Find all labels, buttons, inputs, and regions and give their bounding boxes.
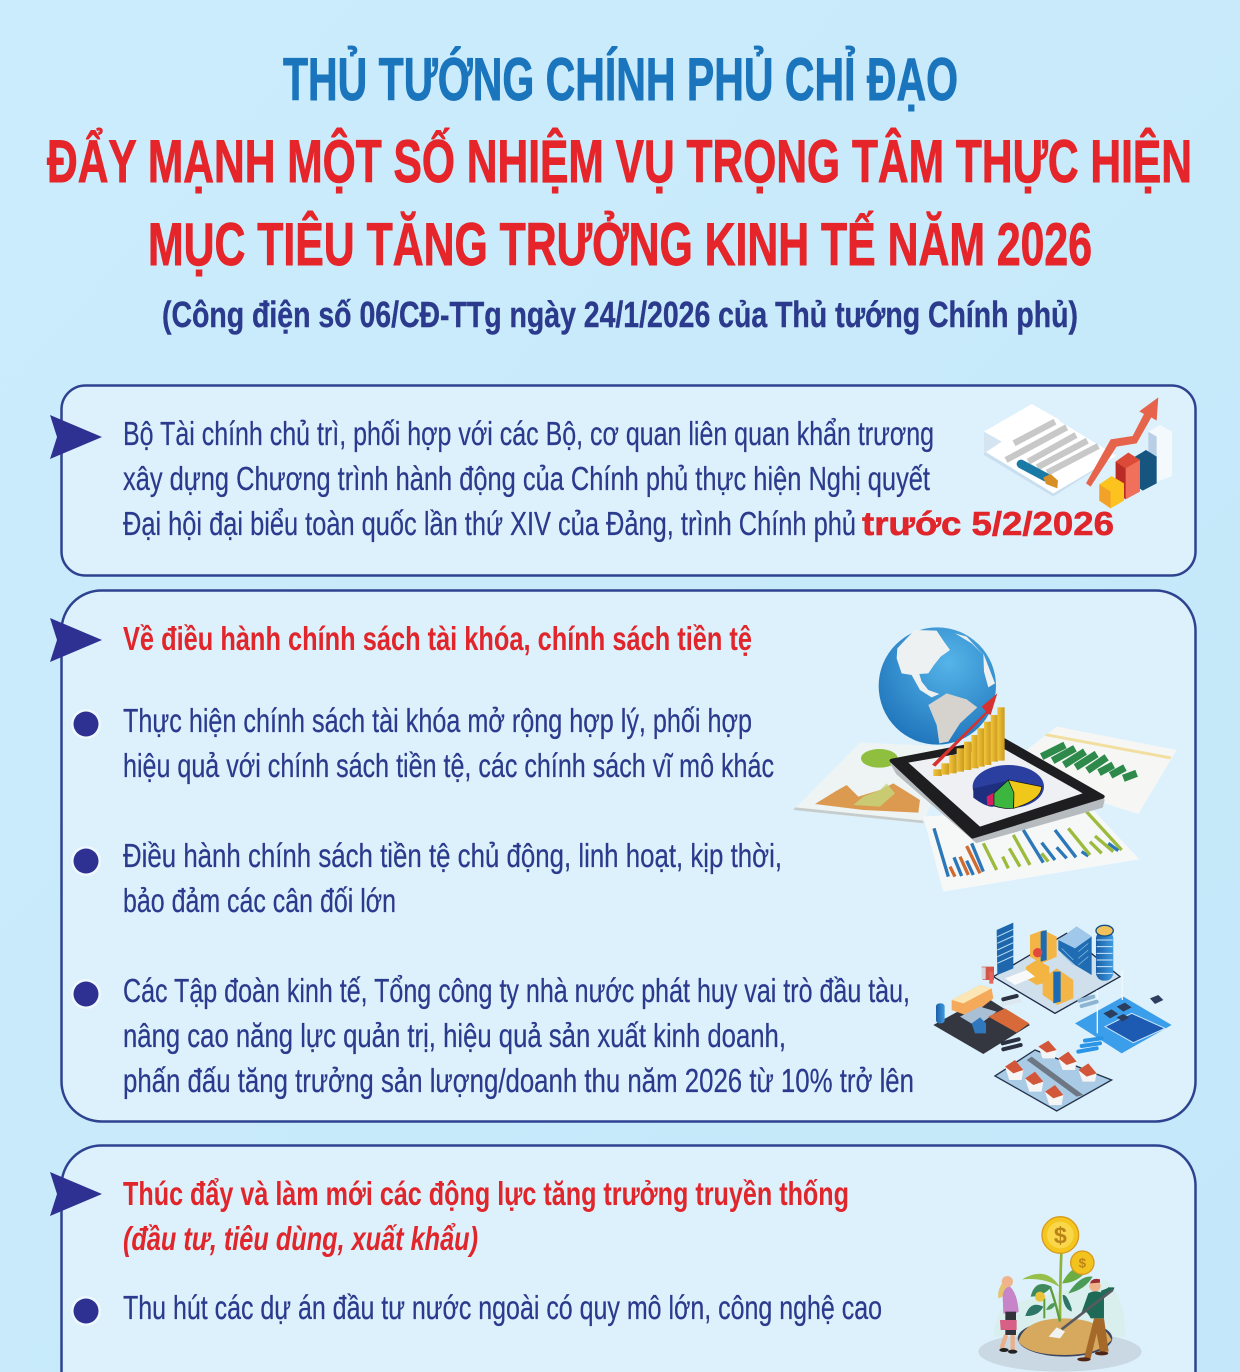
icon: document and rising chart (984, 397, 1172, 508)
panel 1 text (123, 415, 1114, 542)
panel 1 text: trước 5/2/2026 (862, 505, 1114, 542)
panel 3 heading: (đầu tư, tiêu dùng, xuất khẩu) (123, 1220, 478, 1257)
panel 1 text: Bộ Tài chính chủ trì, phối hợp với các Bộ, cơ quan liên quan khẩn trương (123, 415, 934, 452)
panel 1 text: xây dựng Chương trình hành động của Chính phủ thực hiện Nghị quyết (123, 460, 930, 497)
arrow marker (50, 415, 102, 459)
bullet item 3: phấn đấu tăng trưởng sản lượng/doanh thu năm 2026 từ 10% trở lên (123, 1062, 914, 1099)
bullet item: Thu hút các dự án đầu tư nước ngoài có quy mô lớn, công nghệ cao (123, 1289, 882, 1326)
bullet item 3: nâng cao năng lực quản trị, hiệu quả sản xuất kinh doanh, (123, 1017, 786, 1054)
woman (998, 1276, 1019, 1354)
arrow marker (50, 1172, 102, 1216)
bullet item 2: Điều hành chính sách tiền tệ chủ động, linh hoạt, kịp thời, (123, 837, 782, 874)
bullet item 1 (71, 702, 774, 784)
panel 2: fiscal and monetary policy (50, 590, 1196, 1122)
panel 3: traditional growth drivers (50, 1146, 1196, 1372)
man with shovel (1049, 1279, 1113, 1361)
title (47, 46, 1192, 278)
panel 3 heading (123, 1175, 849, 1257)
panel 1 text: Đại hội đại biểu toàn quốc lần thứ XIV của Đảng, trình Chính phủ (123, 505, 856, 542)
bullet item 3: Các Tập đoàn kinh tế, Tổng công ty nhà nước phát huy vai trò đầu tàu, (123, 972, 910, 1009)
icon: globe, tablet and charts (793, 627, 1177, 892)
factory block (933, 997, 1030, 1054)
panel 3 heading: Thúc đẩy và làm mới các động lực tăng trưởng truyền thống (123, 1175, 849, 1212)
icon: investors growing money plant: $ (1054, 1222, 1067, 1248)
bullet item 3 (71, 972, 914, 1099)
housing block (995, 1050, 1112, 1111)
icon: isometric city (933, 923, 1172, 1111)
bullet item 1: Thực hiện chính sách tài khóa mở rộng hợp lý, phối hợp (123, 702, 752, 739)
icon: investors growing money plant: $ (1079, 1255, 1087, 1270)
bullet item 1: hiệu quả với chính sách tiền tệ, các chính sách vĩ mô khác (123, 747, 774, 784)
connecting steps (1003, 996, 1102, 1052)
bullet item 2 (71, 837, 782, 919)
panel 2 heading: Về điều hành chính sách tài khóa, chính sách tiền tệ (123, 620, 752, 657)
panel 1: action programme (50, 386, 1196, 576)
icon: investors growing money plant (978, 1217, 1142, 1372)
city block (993, 933, 1120, 1013)
bullet item 2: bảo đảm các cân đối lớn (123, 882, 396, 919)
solar block (1075, 997, 1172, 1053)
arrow marker (50, 618, 102, 662)
